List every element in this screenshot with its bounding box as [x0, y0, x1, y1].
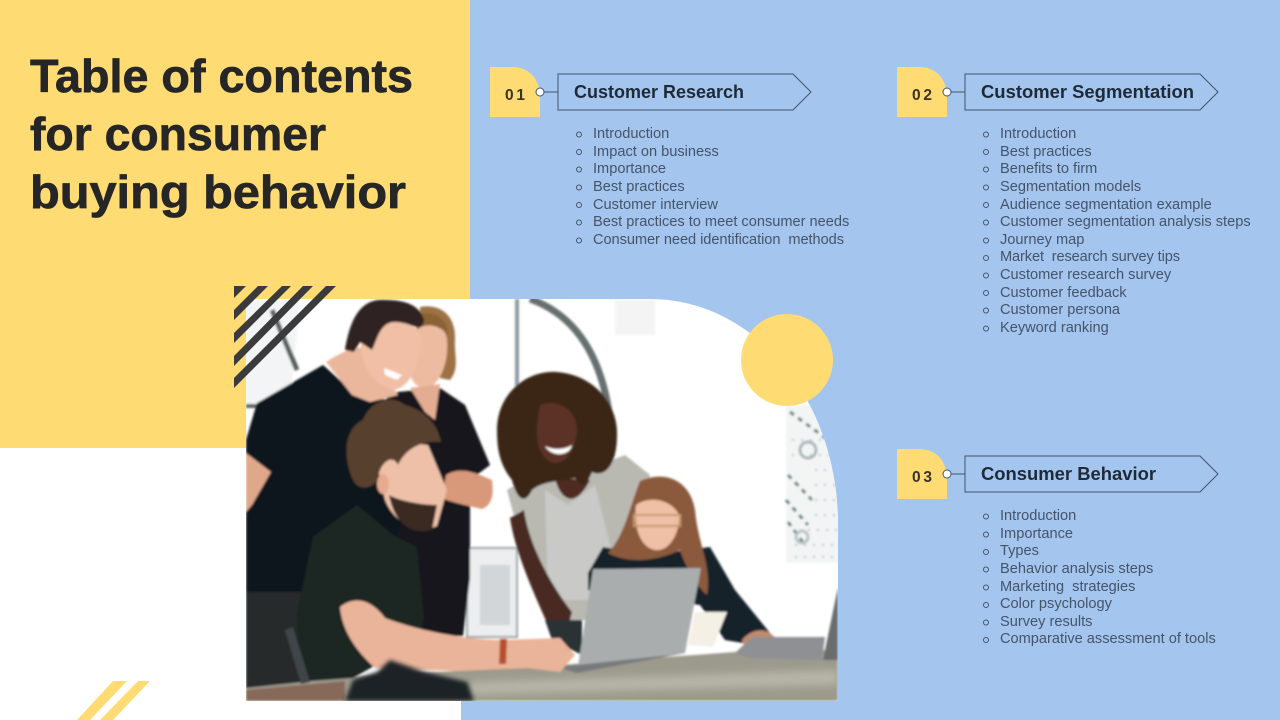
list 01: Best practices to meet consumer needs	[593, 214, 849, 230]
connector 02	[943, 88, 965, 96]
section 03: Consumer Behavior	[897, 449, 1218, 647]
number badge 02	[897, 67, 947, 117]
camera	[345, 660, 474, 701]
number badge 01: 01	[505, 87, 525, 104]
title: Table of contents	[30, 50, 413, 102]
number badge 01	[490, 67, 540, 117]
list 03	[984, 508, 1216, 647]
number badge 02: 02	[912, 87, 932, 104]
woman standing, curly hair	[497, 372, 650, 655]
list 01: Importance	[593, 161, 666, 177]
title: buying behavior	[30, 166, 406, 218]
list 03: Behavior analysis steps	[1000, 561, 1153, 577]
list 01: Consumer need identification methods	[593, 232, 844, 248]
section 01: Customer Research	[490, 67, 849, 248]
list 02: Customer segmentation analysis steps	[1000, 214, 1251, 230]
list 01: Impact on business	[593, 144, 719, 160]
list 02	[984, 126, 1251, 336]
connector 03	[943, 470, 965, 478]
right laptop	[735, 587, 838, 660]
decoration: yellow circle	[741, 314, 833, 406]
heading 02: Customer Segmentation	[981, 82, 1194, 102]
title: for consumer	[30, 108, 326, 160]
list 03: Comparative assessment of tools	[1000, 631, 1216, 647]
list 02: Customer persona	[1000, 302, 1121, 318]
title	[30, 50, 413, 218]
list 03: Survey results	[1000, 614, 1092, 630]
poster on wall	[786, 405, 841, 563]
list 02: Segmentation models	[1000, 179, 1141, 195]
photo: team around a laptop	[246, 299, 841, 701]
man left, dark hair	[246, 300, 424, 688]
list 03: Marketing strategies	[1000, 579, 1135, 595]
heading 01: Customer Research	[574, 82, 744, 102]
list 01: Customer interview	[593, 197, 718, 213]
window frames	[246, 299, 655, 637]
table	[246, 650, 838, 701]
list 02: Customer feedback	[1000, 285, 1127, 301]
section 02: Customer Segmentation	[897, 67, 1251, 336]
list 01	[576, 126, 849, 248]
heading 03	[965, 456, 1218, 492]
hand on keyboard	[538, 660, 570, 673]
heading 03: Consumer Behavior	[981, 464, 1156, 484]
heading 01	[558, 74, 811, 110]
list 01: Best practices	[593, 179, 685, 195]
list 01: Introduction	[593, 126, 669, 142]
man behind, blond	[380, 306, 493, 636]
connector 01	[536, 88, 558, 96]
list 02: Keyword ranking	[1000, 320, 1109, 336]
number badge 03	[897, 449, 947, 499]
decoration: yellow bottom stripes	[77, 681, 150, 720]
list 02: Introduction	[1000, 126, 1076, 142]
list 03: Importance	[1000, 526, 1073, 542]
woman seated, glasses	[588, 477, 778, 648]
list 03: Types	[1000, 543, 1039, 559]
list 02: Best practices	[1000, 144, 1092, 160]
list 03: Color psychology	[1000, 596, 1113, 612]
list 02: Journey map	[1000, 232, 1084, 248]
list 02: Customer research survey	[1000, 267, 1172, 283]
center laptop	[558, 568, 701, 673]
heading 02	[965, 74, 1218, 110]
panel: white lower-left background	[0, 448, 461, 720]
list 03: Introduction	[1000, 508, 1076, 524]
list 02: Benefits to firm	[1000, 161, 1097, 177]
list 02: Market research survey tips	[1000, 249, 1180, 265]
list 02: Audience segmentation example	[1000, 197, 1212, 213]
decoration: dark diagonal stripes	[234, 286, 336, 388]
man seated, bun	[285, 400, 575, 684]
number badge 03: 03	[912, 469, 932, 486]
panel: yellow title background	[0, 0, 470, 448]
